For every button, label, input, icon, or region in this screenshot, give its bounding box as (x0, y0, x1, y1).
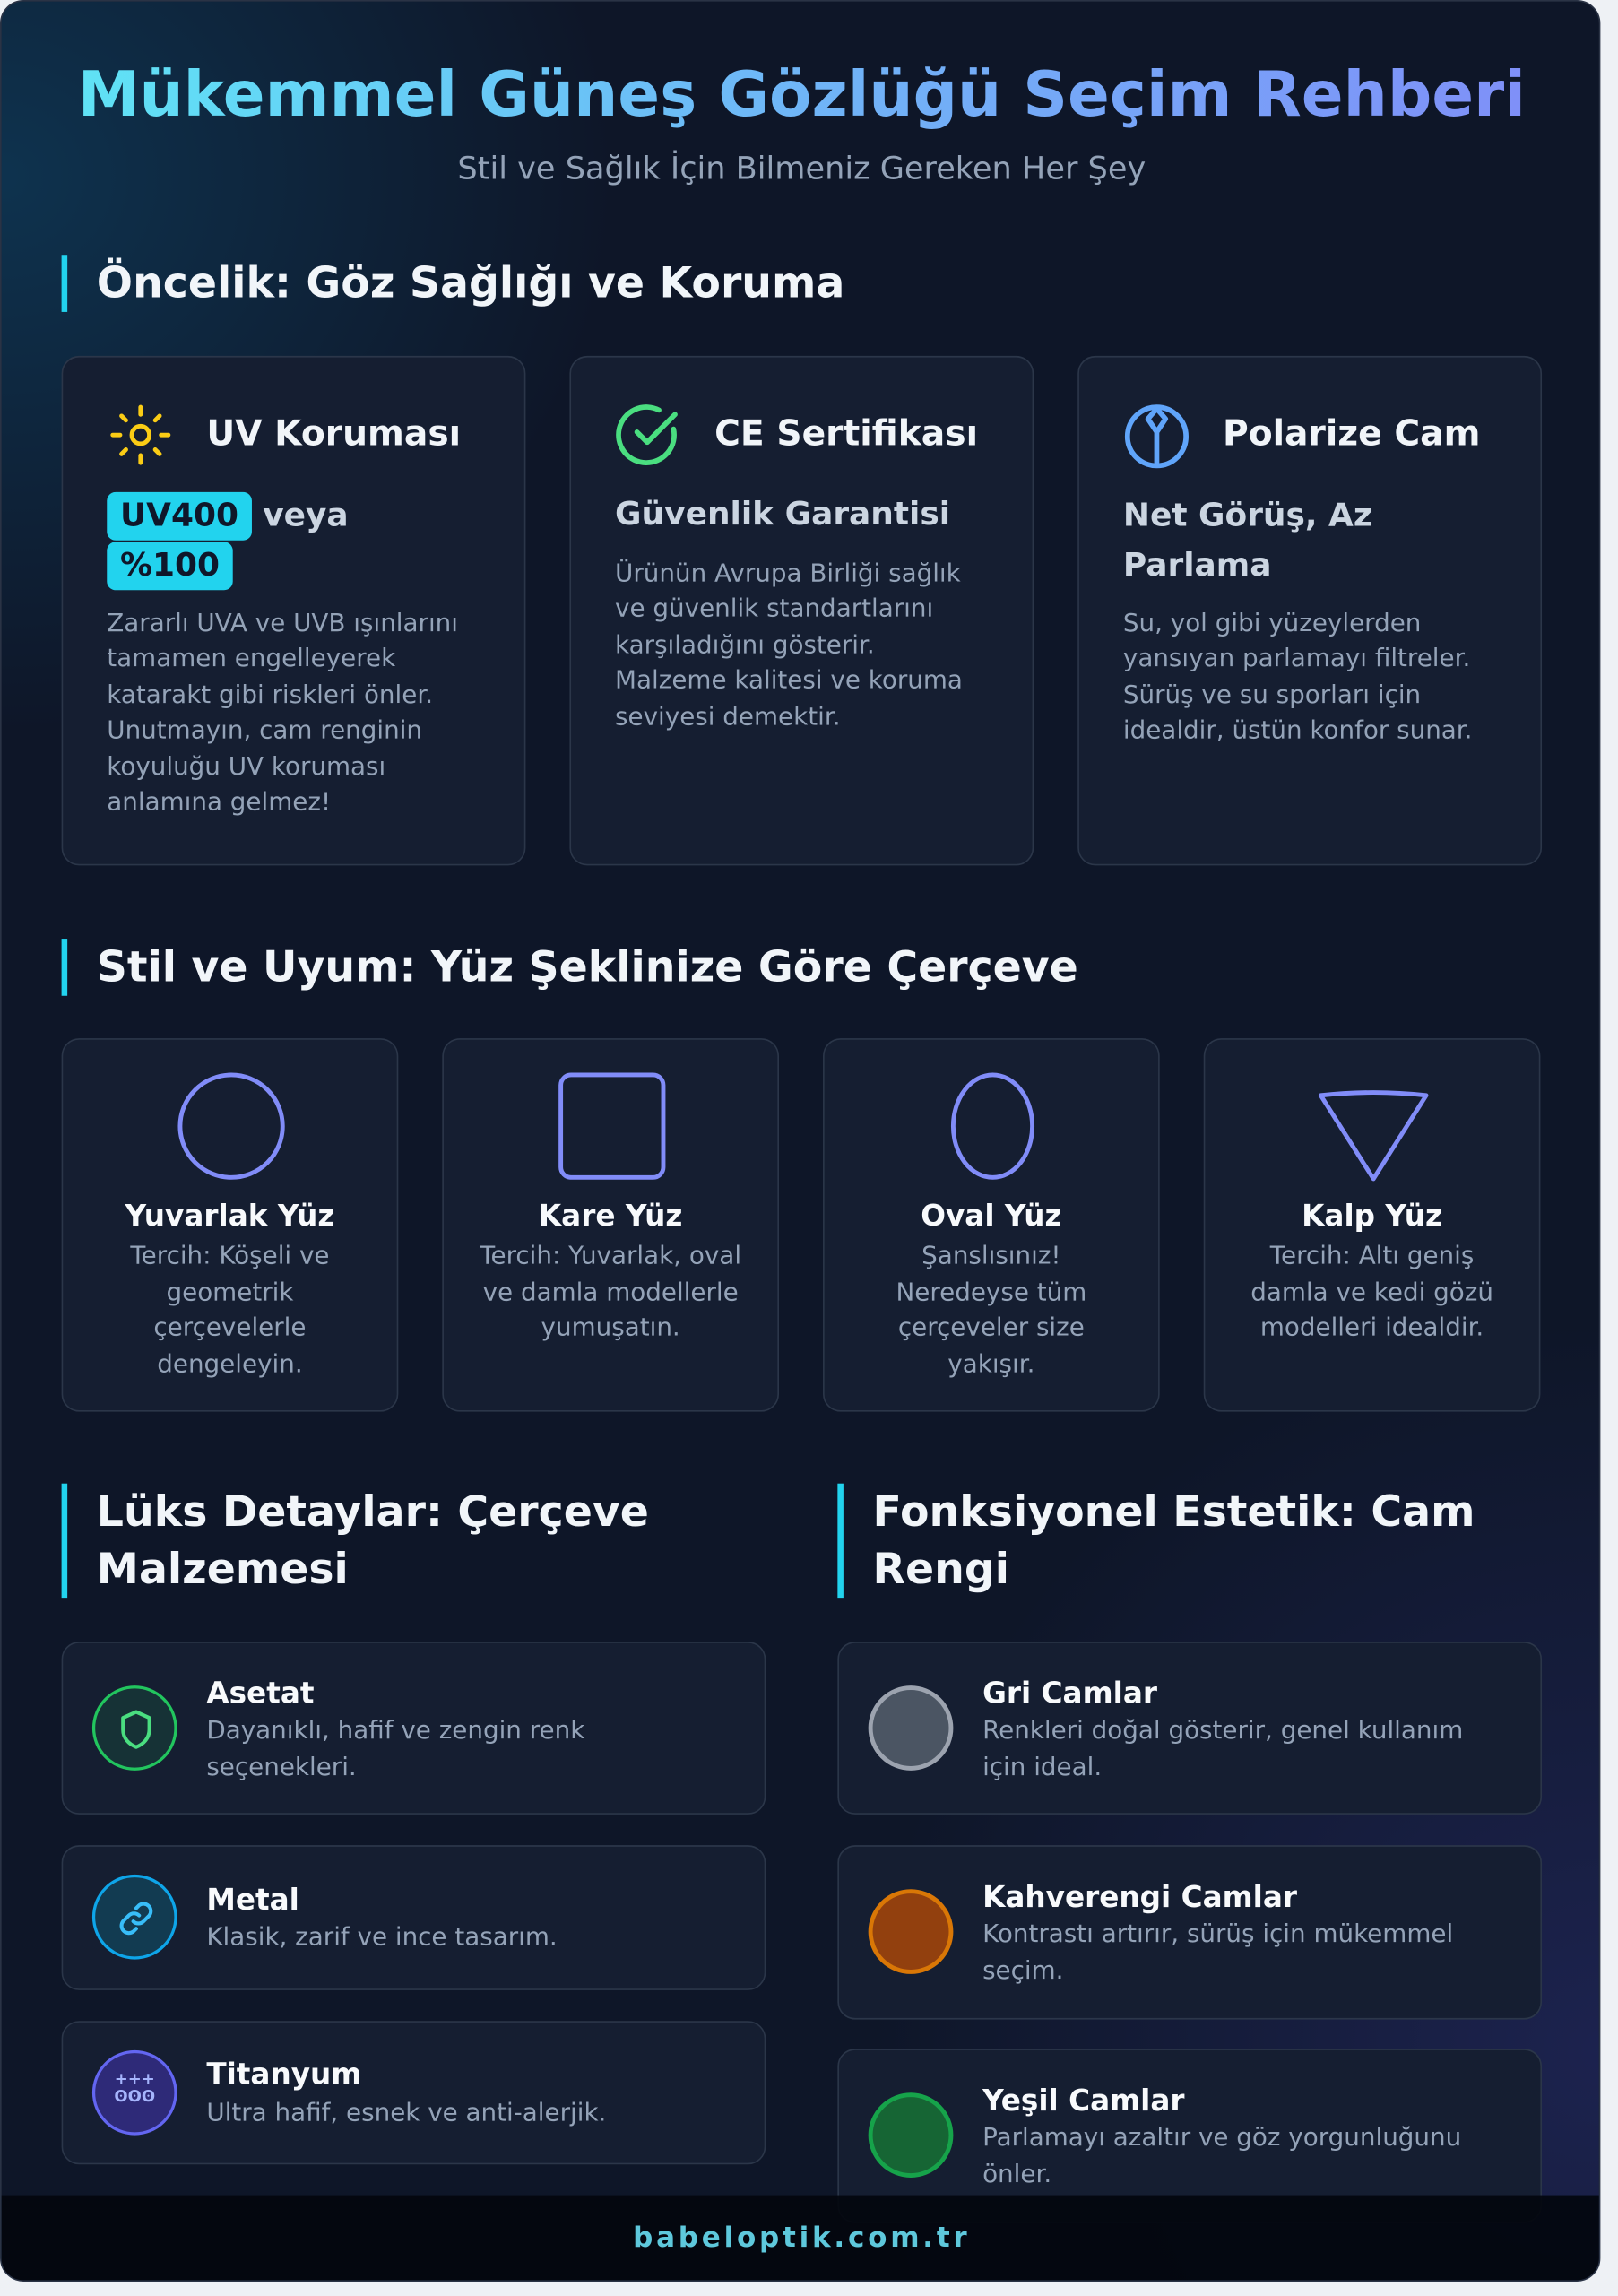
item: titanium (62, 2021, 766, 2164)
panel: round face: Yuvarlak Yüz (125, 1198, 334, 1233)
panel: oval face: çerçeveler size (898, 1313, 1085, 1343)
panel: CE (569, 356, 1034, 865)
panel: square face: Tercih: Yuvarlak, oval ve damla modellerle yumuşatın. (480, 1242, 741, 1343)
item: gray lens (837, 1642, 1542, 1815)
panel: UV protection (62, 356, 525, 865)
panel: square face: Kare Yüz (539, 1198, 682, 1233)
item: brown lens: Kahverengi Camlar (982, 1879, 1297, 1914)
item: gray lens: Renkleri doğal gösterir, genel kullanım için ideal. (982, 1716, 1463, 1781)
panel: square face (442, 1038, 779, 1412)
section heading: materials: Lüks Detaylar: Çerçeve (97, 1486, 649, 1537)
item: acetate: Dayanıklı, hafif ve zengin renk seçenekleri. (206, 1716, 584, 1781)
panel: oval face: yakışır. (947, 1349, 1034, 1379)
section heading: health: Öncelik: Göz Sağlığı ve Koruma (97, 257, 844, 308)
item: green lens: Yeşil Camlar (982, 2083, 1185, 2118)
item: green lens: Parlamayı azaltır ve göz yorgunluğunu önler. (982, 2124, 1461, 2188)
panel: oval face: Şanslısınız! (921, 1242, 1061, 1271)
item: titanium: Ultra hafif, esnek ve anti-alerjik. (206, 2099, 606, 2127)
footer (2, 2196, 1602, 2283)
panel: heart face: Tercih: Altı geniş damla ve kedi gözü modelleri idealdir. (1250, 1242, 1493, 1343)
footer: babeloptik.com.tr (633, 2222, 971, 2254)
subheading (1123, 498, 1372, 585)
icon: check (616, 404, 678, 465)
panel: round face: Tercih: Köşeli ve geometrik çerçevelerle dengeleyin. (130, 1242, 329, 1379)
section heading: lens colour (837, 1484, 1475, 1598)
subheading: Parlama (1123, 548, 1271, 585)
icon: titanium (92, 2050, 177, 2136)
panel: round face (62, 1038, 398, 1412)
icon: green circle (869, 2092, 953, 2178)
icon: link (92, 1875, 177, 1960)
icon: titanium: ʘʘʘ (114, 2087, 155, 2106)
panel: oval face: Neredeyse tüm (896, 1278, 1086, 1307)
icon: titanium: +++ (115, 2069, 155, 2088)
item: green lens (837, 2049, 1542, 2223)
item: acetate (62, 1642, 766, 1815)
item: acetate: Asetat (206, 1676, 315, 1711)
text: Ürünün Avrupa Birliği sağlık ve güvenlik standartlarını karşıladığını gösterir. Malzeme kalitesi ve koruma seviyesi demektir. (615, 559, 963, 732)
section heading: lens colour: Fonksiyonel Estetik: Cam (873, 1486, 1475, 1537)
badges: UV400 (120, 498, 238, 534)
icon: shield (92, 1685, 177, 1771)
panel: heart face (1204, 1038, 1540, 1412)
icon: brown circle (869, 1889, 953, 1974)
icon: gray circle (869, 1685, 953, 1771)
icon: sun (110, 405, 170, 465)
heading: UV Koruması (206, 413, 461, 454)
item: metal: Klasik, zarif ve ince tasarım. (206, 1923, 558, 1952)
item: metal (62, 1845, 766, 1990)
section heading: materials: Malzemesi (97, 1544, 349, 1593)
item: metal: Metal (206, 1882, 299, 1917)
panel: oval face: Oval Yüz (921, 1198, 1061, 1233)
section heading: face shapes: Stil ve Uyum: Yüz Şeklinize Göre Çerçeve (97, 941, 1078, 992)
item: brown lens (837, 1845, 1542, 2020)
icon: triangle (1318, 1090, 1429, 1182)
badges (107, 491, 349, 590)
icon: polarize (1124, 404, 1189, 468)
text: Zararlı UVA ve UVB ışınlarını tamamen engelleyerek katarakt gibi riskleri önler. Unutmayın, cam renginin koyuluğu UV koruması anlamına gelmez! (107, 610, 458, 818)
panel: heart face: Kalp Yüz (1302, 1198, 1442, 1233)
text: Su, yol gibi yüzeylerden yansıyan parlamayı filtreler. Sürüş ve su sporları için idealdir, üstün konfor sunar. (1123, 610, 1473, 746)
subheading: Net Görüş, Az (1123, 498, 1372, 534)
icon: square (558, 1072, 665, 1180)
subtitle: Stil ve Sağlık İçin Bilmeniz Gereken Her Şey (457, 151, 1146, 187)
icon: circle (177, 1072, 285, 1180)
section heading: lens colour: Rengi (873, 1544, 1009, 1593)
subheading: Güvenlik Garantisi (615, 497, 950, 533)
item: titanium: Titanyum (206, 2056, 361, 2092)
panel: polarized (1077, 356, 1542, 865)
heading: CE Sertifikası (714, 413, 978, 454)
badges: %100 (120, 548, 220, 585)
section heading: materials (62, 1484, 649, 1598)
icon: oval (950, 1072, 1034, 1180)
panel: oval face (823, 1038, 1160, 1412)
item: gray lens: Gri Camlar (982, 1676, 1157, 1711)
badges: veya (263, 498, 349, 534)
title: Mükemmel Güneş Gözlüğü Seçim Rehberi (78, 58, 1526, 130)
heading: Polarize Cam (1223, 413, 1480, 454)
item: brown lens: Kontrastı artırır, sürüş için mükemmel seçim. (982, 1919, 1453, 1985)
